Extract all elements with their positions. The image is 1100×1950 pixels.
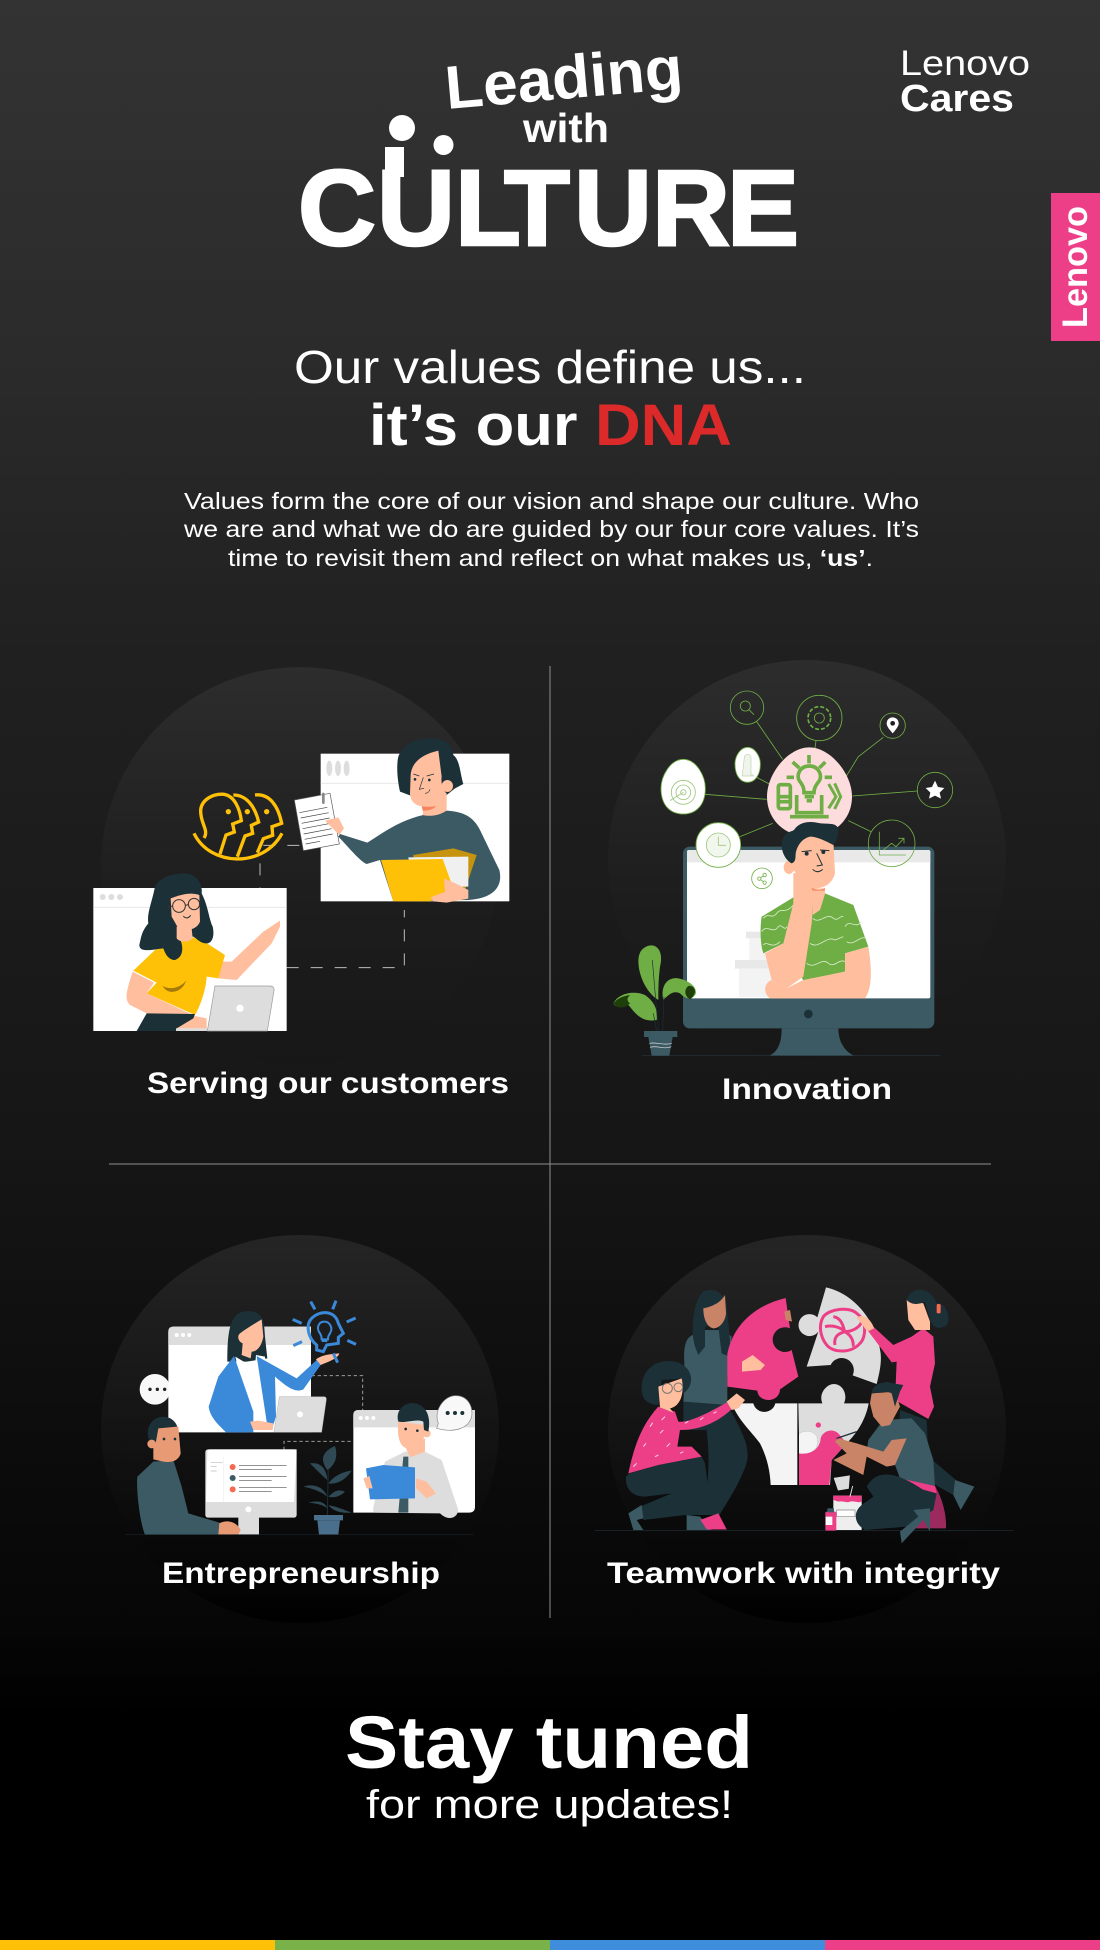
plant — [613, 945, 696, 1056]
heading: it's our DNA: it’s our DNA — [369, 393, 732, 458]
intro paragraph: we are and what we do are guided by our four core values. It’s — [183, 516, 919, 542]
title line: CULTURE: CULTURE — [298, 147, 799, 268]
window: right — [353, 1410, 475, 1513]
title line: with: with — [522, 105, 609, 151]
window: right — [321, 754, 509, 901]
figure: seated man painting — [833, 1382, 946, 1543]
monitor — [642, 847, 940, 1056]
connector dashed lines — [260, 845, 404, 968]
title line: Leading: Leading — [442, 33, 685, 122]
logo: Lenovo Cares: Lenovo — [900, 44, 1030, 83]
bottom colour bar — [0, 1940, 1100, 1950]
figure: crouching woman with glasses — [626, 1361, 745, 1530]
puzzle piece: pink top left — [727, 1298, 798, 1400]
window: left — [93, 888, 287, 1031]
puzzle piece: white lower — [732, 1384, 869, 1485]
figure: thinking man — [761, 822, 871, 998]
label: Teamwork with integrity: Teamwork with integrity — [607, 1557, 1000, 1590]
label: Innovation: Innovation — [722, 1073, 892, 1106]
illustration: man thinking at monitor — [613, 691, 953, 1056]
intro paragraph — [183, 488, 919, 571]
idea circles — [730, 691, 953, 808]
closing message: for more updates: for more updates! — [366, 1783, 733, 1827]
panel: Teamwork with integrity — [595, 1287, 1013, 1590]
figure: woman placing piece — [857, 1290, 974, 1510]
figure: standing woman — [683, 1290, 765, 1529]
logo tab: Lenovo: Lenovo — [1056, 206, 1095, 328]
figure: man at desk — [137, 1417, 241, 1535]
puzzle piece: grey top right — [799, 1287, 881, 1384]
title: Leading with Culture — [298, 33, 799, 268]
illustration: team assembling puzzle — [595, 1287, 1013, 1543]
illustration: entrepreneurs collaborating — [125, 1301, 475, 1535]
closing message: Stay tuned: Stay tuned — [345, 1701, 753, 1784]
icon: head with lightbulb — [293, 1301, 356, 1363]
paint can and bottle — [825, 1476, 862, 1531]
figure: man with folder — [363, 1396, 472, 1518]
panel backdrop circles — [101, 660, 1006, 1623]
intro paragraph: Values form the core of our vision and shape our culture. Who — [184, 488, 919, 514]
label: Serving our customers: Serving our customers — [147, 1067, 509, 1100]
window: centre — [168, 1327, 311, 1432]
logo tab: Lenovo — [1051, 193, 1100, 341]
floor line — [125, 1534, 473, 1536]
title decoration: raised U stem and dots — [385, 115, 454, 177]
speech bubble left — [140, 1374, 170, 1405]
intro paragraph: time to revisit them and reflect on what makes us, ‘us’. — [228, 545, 873, 571]
monitor — [205, 1449, 297, 1535]
quadrant dividers — [109, 666, 991, 1618]
dashed connectors — [284, 1376, 363, 1450]
icon: three heads — [194, 794, 282, 859]
illustration: customer service video call — [93, 738, 509, 1031]
label: Entrepreneurship: Entrepreneurship — [162, 1557, 440, 1590]
idea connectors — [705, 722, 917, 870]
panel: Entrepreneurship — [125, 1301, 475, 1590]
figure: woman presenting idea — [209, 1311, 339, 1432]
idea icons: search gear pin star chart clock share targets — [661, 701, 944, 889]
figure: man with folder — [338, 738, 500, 903]
logo: Lenovo Cares — [900, 44, 1030, 120]
central egg with lightbulb icon — [767, 747, 852, 837]
figure: woman with laptop — [127, 873, 280, 1031]
floor line — [595, 1529, 1013, 1531]
logo: Lenovo Cares: Cares — [900, 78, 1014, 120]
panel: Innovation — [613, 691, 953, 1106]
plant — [303, 1446, 352, 1535]
laptop logo — [297, 1411, 303, 1417]
laptop — [274, 1397, 326, 1432]
heading: Our values define us: Our values define us... — [294, 341, 806, 393]
panel: Serving our customers — [93, 738, 509, 1100]
document with paper clip — [294, 793, 344, 851]
